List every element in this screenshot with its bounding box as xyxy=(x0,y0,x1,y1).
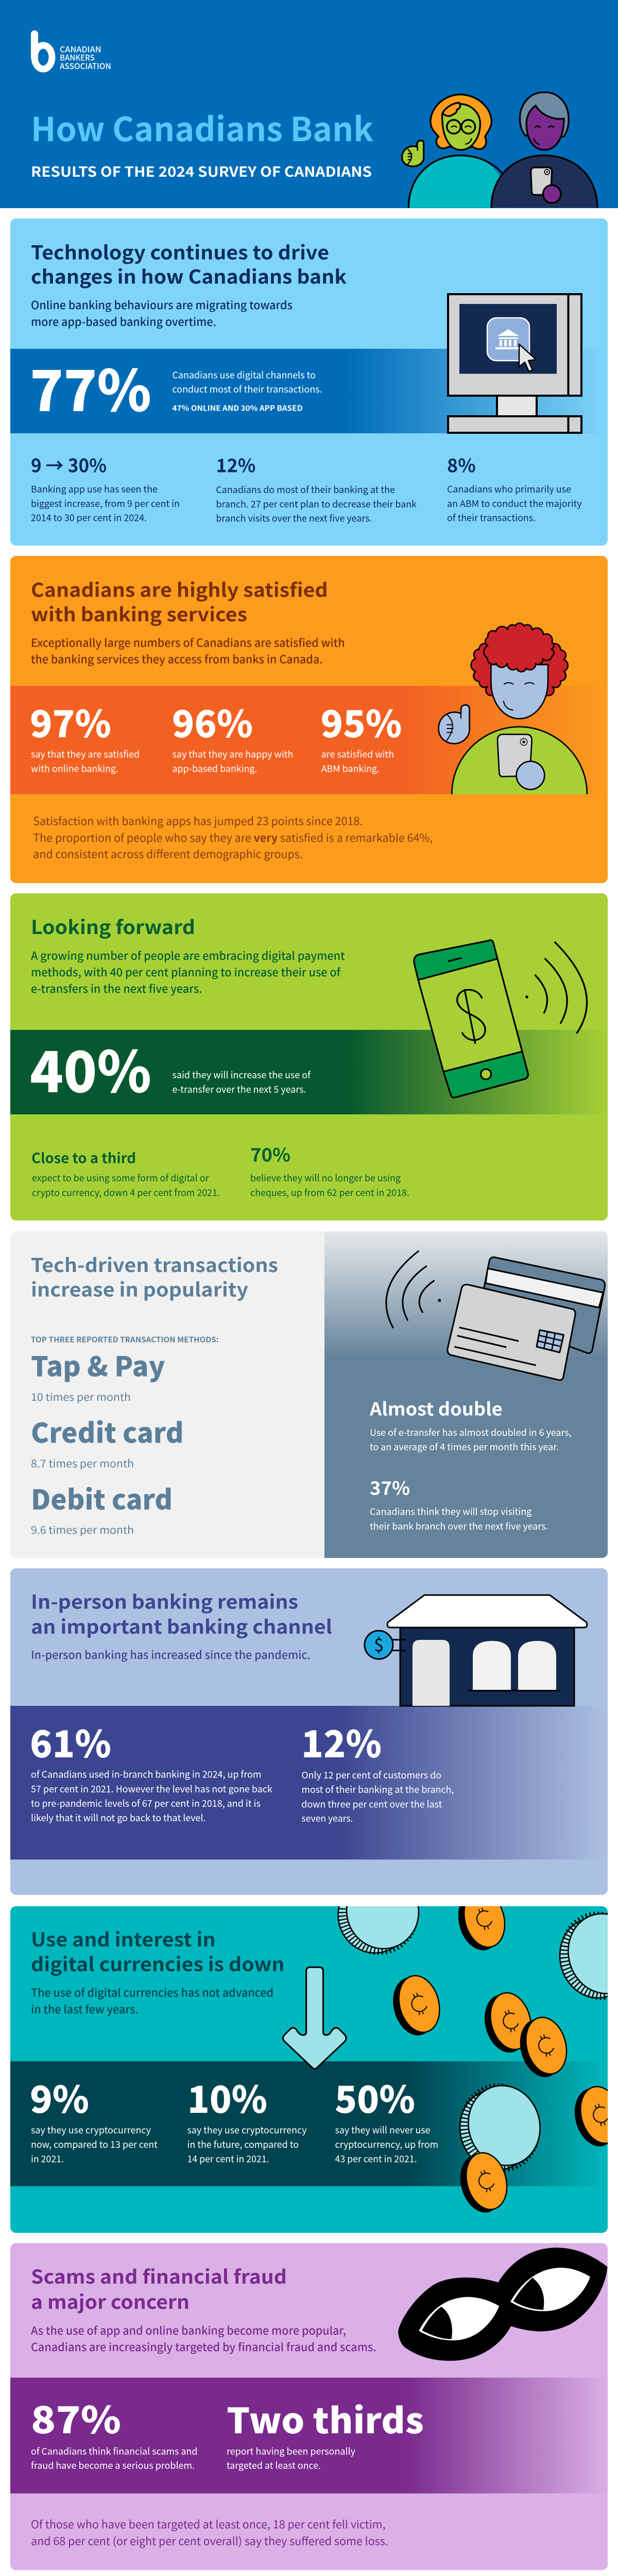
stat: 12% xyxy=(216,451,417,525)
stat: 9%: in 2021. xyxy=(31,2152,64,2165)
heading: Technology continues to drive xyxy=(31,237,329,265)
stat: 95%: ABM banking. xyxy=(321,761,380,775)
stat: almost double xyxy=(369,1395,572,1453)
stat: almost double: Use of e-transfer has almost doubled in 6 years, xyxy=(370,1426,572,1439)
method: debit card: Debit card xyxy=(31,1479,173,1518)
illustration: contactless cards xyxy=(386,1251,605,1380)
stat: almost double: Almost double xyxy=(369,1395,503,1421)
panel: technology xyxy=(10,218,608,546)
heading xyxy=(31,1586,332,1639)
stat: 12%: Only 12 per cent of customers do xyxy=(301,1768,441,1782)
header banner xyxy=(0,0,618,208)
heading: Tech-driven transactions xyxy=(31,1250,278,1278)
panel: looking forward xyxy=(10,893,608,1221)
stat: 61%: 57 per cent in 2021. However the level has not gone back xyxy=(31,1782,272,1795)
stat: 95%: 95% xyxy=(320,694,402,748)
band: 40% statistic: 40% xyxy=(30,1026,151,1109)
panel: in-person banking xyxy=(10,1568,608,1895)
stat: 12% xyxy=(301,1714,454,1825)
stat: close to a third: expect to be using some form of digital or xyxy=(32,1171,210,1184)
intro text: Online banking behaviours are migrating towards xyxy=(31,297,293,313)
heading xyxy=(31,237,347,290)
note text: and consistent across different demographic groups. xyxy=(33,846,303,861)
heading: a major concern xyxy=(31,2286,190,2314)
stat: 12%: seven years. xyxy=(301,1811,353,1825)
intro text xyxy=(31,947,345,996)
stat: 70%: believe they will no longer be using xyxy=(250,1171,401,1184)
intro text xyxy=(31,297,293,330)
stat: two thirds: Two thirds xyxy=(227,2393,424,2444)
heading: digital currencies is down xyxy=(31,1949,284,1977)
subtitle: RESULTS OF THE 2024 SURVEY OF CANADIANS xyxy=(31,161,372,181)
band: 77% statistic: 47% ONLINE AND 30% APP BASED xyxy=(172,403,303,413)
stat: 9 to 30%: 2014 to 30 per cent in 2024. xyxy=(31,511,147,524)
stat: 97%: say that they are satisfied xyxy=(31,748,140,761)
method: debit card: 9.6 times per month xyxy=(31,1522,134,1537)
stat: 9%: say they use cryptocurrency xyxy=(31,2123,151,2137)
stat: 50% xyxy=(335,2070,438,2165)
stat: 70%: cheques, up from 62 per cent in 2018. xyxy=(250,1186,409,1199)
stat: 50%: say they will never use xyxy=(335,2123,431,2137)
stat: two thirds xyxy=(227,2393,424,2472)
panel: satisfaction xyxy=(10,556,608,883)
stat: almost double: to an average of 4 times per month this year. xyxy=(370,1440,559,1453)
stat: 12%: branch visits over the next five years. xyxy=(216,512,372,525)
heading: In-person banking remains xyxy=(31,1586,298,1614)
stat: 10% xyxy=(187,2070,307,2165)
stat: 97%: with online banking. xyxy=(31,761,118,775)
method: credit card: Credit card xyxy=(31,1412,184,1451)
stat: 9% xyxy=(30,2070,158,2165)
stat: 9 to 30%: 9 → 30% xyxy=(31,451,107,478)
stat: 8%: an ABM to conduct the majority xyxy=(447,497,582,510)
band: 40% statistic: e-transfer over the next 5 years. xyxy=(172,1082,306,1096)
intro text: Exceptionally large numbers of Canadians are satisfied with xyxy=(31,635,345,651)
intro text: e-transfers in the next five years. xyxy=(31,980,202,996)
illustration: two people with phone xyxy=(402,92,597,208)
intro text: methods, with 40 per cent planning to increase their use of xyxy=(31,964,341,980)
stat: close to a third: crypto currency, down 4 per cent from 2021. xyxy=(32,1186,220,1199)
logo: Canadian Bankers Association: CANADIAN xyxy=(60,44,101,55)
stat: 70% xyxy=(250,1141,409,1199)
panel: digital currencies xyxy=(10,1906,608,2233)
title: How Canadians Bank xyxy=(31,104,373,151)
intro text: As the use of app and online banking become more popular, xyxy=(31,2323,346,2338)
heading: increase in popularity xyxy=(31,1275,248,1302)
list label: TOP THREE REPORTED TRANSACTION METHODS: xyxy=(31,1334,219,1345)
stat: 87%: fraud have become a serious problem. xyxy=(31,2459,195,2472)
stat: 70%: 70% xyxy=(250,1141,290,1167)
stat: 37% xyxy=(370,1474,548,1533)
stat: 87%: 87% xyxy=(31,2390,121,2444)
intro text xyxy=(31,635,345,667)
band: cryptocurrency statistics xyxy=(10,2061,608,2186)
intro text xyxy=(31,2323,376,2355)
method: credit card xyxy=(31,1412,184,1470)
intro text: In-person banking has increased since the pandemic. xyxy=(31,1647,311,1663)
stat: 61%: likely that it will not go back to that level. xyxy=(31,1811,206,1824)
illustration: computer with bank app xyxy=(448,294,581,433)
band: 77% statistic: 77% xyxy=(30,345,151,428)
heading: Scams and financial fraud xyxy=(31,2261,287,2289)
stat: 37%: their bank branch over the next five years. xyxy=(370,1519,548,1533)
note text: The proportion of people who say they are very satisfied is a remarkable 64%, xyxy=(33,829,433,845)
icon: down arrow xyxy=(283,1967,346,2069)
heading: Canadians are highly satisfied xyxy=(31,574,328,602)
panel: scams and fraud xyxy=(10,2243,608,2570)
stat: 12%: down three per cent over the last xyxy=(301,1797,442,1810)
heading: Looking forward xyxy=(31,912,195,940)
illustration: eye mask xyxy=(398,2248,607,2361)
stat: 9 to 30%: biggest increase, from 9 per cent in xyxy=(31,497,180,510)
stat: 96%: app-based banking. xyxy=(172,761,258,775)
stat: 97%: 97% xyxy=(30,694,111,748)
intro text: more app-based banking overtime. xyxy=(31,313,216,330)
stat: two thirds: report having been personally xyxy=(227,2444,356,2458)
band: 40% statistic xyxy=(10,1026,608,1114)
stat: 12%: 12% xyxy=(301,1714,382,1768)
intro text: Canadians are increasingly targeted by financial fraud and scams. xyxy=(31,2339,376,2355)
stat: 50%: 50% xyxy=(335,2070,415,2124)
stat: 8% xyxy=(447,451,582,524)
method: tap and pay: Tap & Pay xyxy=(31,1345,165,1384)
method: debit card xyxy=(31,1479,173,1537)
stat: 10%: 14 per cent in 2021. xyxy=(187,2152,269,2165)
intro text: A growing number of people are embracing digital payment xyxy=(31,947,345,963)
stat: close to a third: Close to a third xyxy=(31,1147,136,1167)
band: 77% statistic xyxy=(10,345,608,433)
heading xyxy=(31,1250,278,1302)
panel: tech-driven transactions xyxy=(10,1231,608,1558)
stat: 96%: 96% xyxy=(172,694,253,748)
stat: 61%: of Canadians used in-branch banking in 2024, up from xyxy=(31,1768,261,1781)
stat: 61%: to pre-pandemic levels of 67 per cent in 2018, and it is xyxy=(31,1797,261,1810)
illustration: person with red hair and phone xyxy=(439,623,587,794)
stat: 96% xyxy=(172,694,294,775)
heading xyxy=(31,1924,284,1977)
heading xyxy=(31,574,328,627)
logo: Canadian Bankers Association: BANKERS xyxy=(60,52,95,63)
stat: 50%: cryptocurrency, up from xyxy=(335,2138,438,2151)
stat: 9%: 9% xyxy=(30,2070,89,2124)
band: fraud statistics xyxy=(10,2378,608,2494)
stat: two thirds: targeted at least once. xyxy=(227,2459,321,2472)
stat: 8%: Canadians who primarily use xyxy=(447,482,571,496)
note text: Satisfaction with banking apps has jumped 23 points since 2018. xyxy=(33,813,363,829)
illustration: phone with dollar sign and waves xyxy=(414,940,587,1097)
method: tap and pay xyxy=(31,1345,165,1404)
heading: Use and interest in xyxy=(31,1924,216,1952)
illustration: bank branch building: $ xyxy=(374,1631,384,1656)
stat: 10%: in the future, compared to xyxy=(187,2138,299,2151)
note text: and 68 per cent (or eight per cent overall) say they suffered some loss. xyxy=(31,2533,388,2549)
stat: 12%: branch. 27 per cent plan to decrease their bank xyxy=(216,497,417,511)
note text: Of those who have been targeted at least once, 18 per cent fell victim, xyxy=(31,2516,385,2532)
note text xyxy=(31,2516,388,2549)
band: 77% statistic: Canadians use digital channels to xyxy=(172,368,316,381)
heading xyxy=(31,2261,287,2314)
band: 77% statistic: conduct most of their transactions. xyxy=(172,382,322,396)
intro text xyxy=(31,1985,273,2017)
method: credit card: 8.7 times per month xyxy=(31,1455,134,1470)
note text xyxy=(33,813,433,861)
stat: 95% xyxy=(320,694,402,775)
illustration: falling coins xyxy=(337,1906,608,2212)
stat: 8%: 8% xyxy=(447,451,476,478)
stat: 9 to 30%: Banking app use has seen the xyxy=(31,482,158,496)
stat: 87% xyxy=(31,2390,197,2472)
heading: an important banking channel xyxy=(31,1612,332,1639)
heading: with banking services xyxy=(31,599,247,627)
stat: 12%: Canadians do most of their banking at the xyxy=(216,483,395,496)
stat: 61%: 61% xyxy=(30,1714,111,1768)
stat: 37%: Canadians think they will stop visiting xyxy=(370,1505,531,1518)
band: 40% statistic: said they will increase the use of xyxy=(172,1068,311,1081)
stat: 12%: most of their banking at the branch, xyxy=(301,1783,454,1796)
heading: changes in how Canadians bank xyxy=(31,262,347,290)
stat: 97% xyxy=(30,694,140,775)
logo: Canadian Bankers Association: ASSOCIATION xyxy=(60,60,111,72)
illustration: bank branch building xyxy=(365,1595,587,1706)
intro text: the banking services they access from banks in Canada. xyxy=(31,651,323,667)
band: in-branch statistics xyxy=(10,1706,608,1859)
logo: Canadian Bankers Association xyxy=(35,34,111,72)
stat: 9%: now, compared to 13 per cent xyxy=(31,2138,158,2151)
band: satisfaction statistics xyxy=(10,686,608,794)
left column background xyxy=(10,1231,608,1558)
stat: 9 to 30% xyxy=(31,451,180,524)
stat: 96%: say that they are happy with xyxy=(172,748,294,761)
method: tap and pay: 10 times per month xyxy=(31,1389,131,1404)
stat: 10%: say they use cryptocurrency xyxy=(187,2123,307,2137)
stat: 8%: of their transactions. xyxy=(447,511,536,524)
intro text: in the last few years. xyxy=(31,2001,139,2017)
stat: 37%: 37% xyxy=(370,1474,410,1501)
stat: 87%: of Canadians think financial scams and xyxy=(31,2444,197,2458)
stat: 61% xyxy=(30,1714,272,1824)
stat: 12%: 12% xyxy=(216,451,255,478)
stat: 10%: 10% xyxy=(187,2070,267,2124)
stat: 50%: 43 per cent in 2021. xyxy=(335,2152,417,2165)
stat: close to a third xyxy=(31,1147,220,1199)
intro text: The use of digital currencies has not advanced xyxy=(31,1985,273,2001)
stat: 95%: are satisfied with xyxy=(321,748,394,761)
